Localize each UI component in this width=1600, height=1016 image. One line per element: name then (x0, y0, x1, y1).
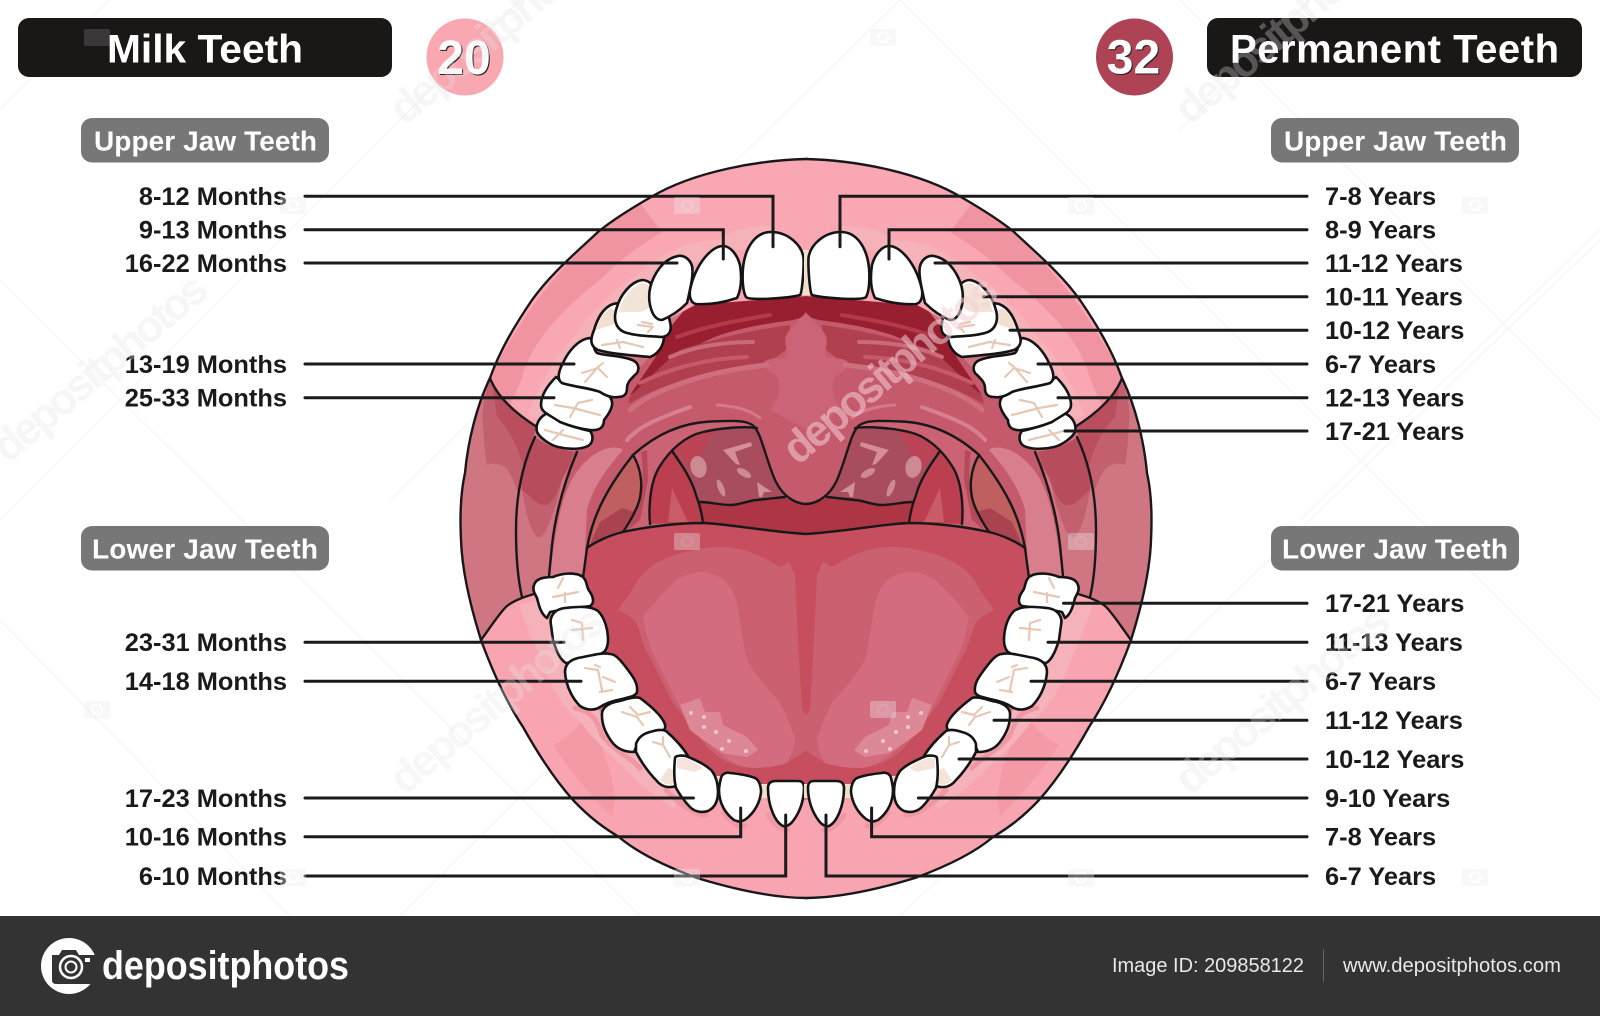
subheading: permanent upper jaw teeth (1271, 118, 1519, 162)
leader: lower 7-8 Years (872, 808, 1436, 852)
leader: 23-31 Months: 23-31 Months (125, 629, 287, 657)
badge: 32 permanent teeth: 32 (1107, 32, 1160, 84)
leader: 8-9 Years: 8-9 Years (1325, 216, 1436, 244)
tooth gaps (714, 250, 808, 798)
tooth: upper first molar (559, 338, 638, 397)
leader: 14-18 Months: 14-18 Months (125, 668, 287, 696)
subheading: permanent lower jaw teeth: Lower Jaw Teeth (1282, 534, 1508, 564)
header: Milk Teeth (18, 18, 392, 77)
upper gum (490, 159, 807, 427)
leader: 9-10 Years: 9-10 Years (1325, 785, 1450, 813)
subheading: milk upper jaw teeth: Upper Jaw Teeth (94, 126, 317, 156)
tooth: upper first premolar (615, 280, 671, 337)
header: Permanent Teeth: Permanent Teeth (1230, 28, 1559, 72)
tooth: lower first molar (565, 653, 637, 710)
tooth: lower canine (674, 756, 718, 812)
leader: 10-16 Months (125, 808, 741, 852)
lower gum (481, 594, 807, 898)
palate (550, 290, 807, 577)
tooth: lower second premolar (602, 697, 665, 752)
upper teeth (537, 232, 804, 449)
website url: www.depositphotos.com (1342, 955, 1561, 977)
leader: 9-13 Months: 9-13 Months (139, 216, 287, 244)
tooth: upper third molar (537, 413, 592, 449)
tooth: upper second molar (541, 377, 612, 430)
leader: lower 7-8 Years: 7-8 Years (1325, 824, 1436, 852)
leader: lower 17-21 Years: 17-21 Years (1325, 590, 1464, 618)
open mouth illustration (460, 159, 1152, 898)
tooth: upper second premolar (591, 303, 664, 357)
leader: 12-13 Years: 12-13 Years (1325, 384, 1464, 412)
header: Milk Teeth: Milk Teeth (107, 28, 303, 72)
tooth: lower third molar (533, 574, 593, 618)
leader: 8-9 Years (889, 216, 1436, 259)
leader: 8-12 Months (139, 183, 773, 247)
leader: 8-12 Months: 8-12 Months (139, 183, 287, 211)
brand name: depositphotos (102, 944, 349, 988)
badge: 32 permanent teeth (1096, 18, 1173, 96)
leader: lower 6-7 Years incisor (826, 815, 1436, 891)
image id: Image ID: 209858122 (1112, 954, 1304, 977)
tooth: upper canine (649, 256, 693, 320)
left half of mouth (460, 159, 808, 898)
leader: 6-10 Months: 6-10 Months (139, 863, 287, 891)
permanent upper jaw labels (840, 183, 1464, 446)
tooth: lower first premolar (636, 730, 688, 787)
lower teeth (533, 574, 804, 826)
throat and tonsils (588, 421, 807, 548)
right half of mouth (mirror) (804, 159, 1152, 898)
badge: 20 milk teeth (426, 18, 504, 96)
cheek and arch outlines (460, 159, 807, 898)
tongue (584, 523, 807, 790)
leader: 16-22 Months: 16-22 Months (125, 250, 287, 278)
tooth: lower second molar (551, 607, 608, 663)
leader: 9-13 Months (139, 216, 723, 259)
subheading: permanent upper jaw teeth: Upper Jaw Teeth (1284, 126, 1507, 156)
tooth: upper central incisor (743, 232, 804, 299)
leader: 10-16 Months: 10-16 Months (125, 824, 287, 852)
milk upper jaw labels (125, 183, 773, 412)
leader: 13-19 Months: 13-19 Months (125, 351, 287, 379)
watermark overlay: depositphotos (380, 596, 614, 804)
leader: 17-23 Months: 17-23 Months (125, 785, 287, 813)
leader: 7-8 Years (840, 183, 1436, 247)
subheading: milk upper jaw teeth (81, 118, 329, 162)
cheek base (460, 159, 807, 898)
header: Permanent Teeth (1207, 18, 1582, 77)
leader: 25-33 Months: 25-33 Months (125, 384, 287, 412)
subheading: milk lower jaw teeth: Lower Jaw Teeth (92, 534, 318, 564)
leader: 11-12 Years: 11-12 Years (1325, 250, 1463, 278)
milk lower jaw labels (125, 629, 786, 891)
leader: 17-21 Years: 17-21 Years (1325, 418, 1464, 446)
leader: 6-10 Months (139, 815, 786, 891)
leader: lower 11-12 Years: 11-12 Years (1325, 707, 1463, 735)
watermark overlay: depositphotos (773, 266, 1007, 474)
leader: 10-11 Years: 10-11 Years (1325, 284, 1463, 312)
leader: lower 6-7 Years first molar: 6-7 Years (1325, 668, 1436, 696)
leader: 11-13 Years: 11-13 Years (1325, 629, 1463, 657)
tooth: lower central incisor (768, 781, 804, 826)
tooth: lower lateral incisor (719, 773, 761, 821)
leader: lower 6-7 Years incisor: 6-7 Years (1325, 863, 1436, 891)
subheading: milk lower jaw teeth (81, 526, 329, 570)
leader: 7-8 Years: 7-8 Years (1325, 183, 1436, 211)
tooth: upper lateral incisor (690, 246, 741, 304)
badge: 20 milk teeth: 20 (437, 32, 491, 85)
icon: depositphotos camera logo (41, 938, 97, 994)
watermark overlay: depositphotos (1165, 596, 1399, 804)
subheading: permanent lower jaw teeth (1271, 526, 1519, 570)
permanent lower jaw labels (826, 590, 1464, 891)
leader: 6-7 Years: 6-7 Years (1325, 351, 1436, 379)
footer bar (0, 916, 1600, 1016)
leader: 10-12 Years: 10-12 Years (1325, 317, 1464, 345)
leader: lower 10-12 Years: 10-12 Years (1325, 746, 1464, 774)
